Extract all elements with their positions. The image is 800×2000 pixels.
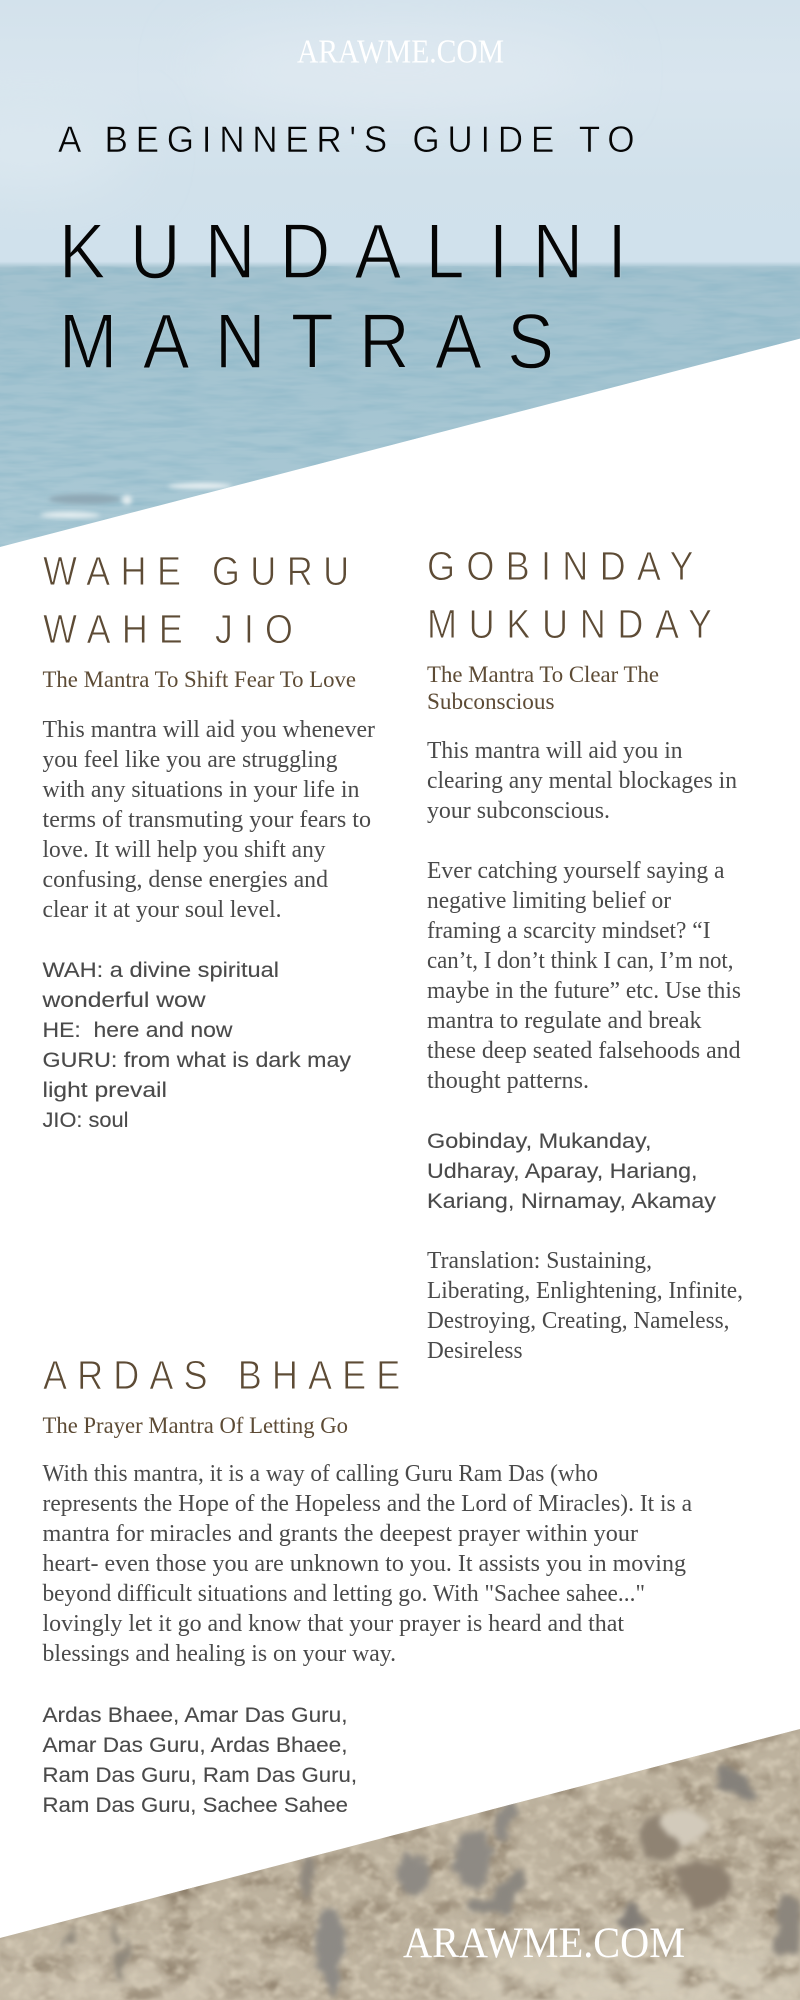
subheading: The Mantra To Shift Fear To Love bbox=[42, 667, 356, 692]
body text: mantra to regulate and break bbox=[427, 1007, 702, 1034]
mantra words: Gobinday, Mukanday, bbox=[427, 1130, 652, 1153]
site name bottom: ARAWME.COM bbox=[403, 1920, 685, 1967]
translation bbox=[427, 1247, 743, 1364]
heading: Wahe Guru: WAHE JIO bbox=[43, 607, 293, 653]
heading: Gobinday Mukunday: MUKUNDAY bbox=[427, 602, 712, 648]
mantra words: Udharay, Aparay, Hariang, bbox=[427, 1160, 698, 1183]
body text: negative limiting belief or bbox=[427, 887, 671, 914]
body text: clear it at your soul level. bbox=[42, 896, 282, 923]
body text: confusing, dense energies and bbox=[42, 866, 328, 893]
translation: Liberating, Enlightening, Infinite, bbox=[427, 1277, 743, 1304]
mantra glossary bbox=[41, 959, 352, 1132]
body text bbox=[42, 1460, 692, 1667]
mantra words: Amar Das Guru, Ardas Bhaee, bbox=[42, 1734, 348, 1757]
heading: Gobinday Mukunday bbox=[427, 544, 712, 648]
subheading: The Mantra To Clear The bbox=[427, 662, 659, 687]
panel: Gobinday Mukunday bbox=[427, 544, 743, 1364]
title block: MANTRAS bbox=[59, 298, 554, 385]
body text: your subconscious. bbox=[427, 797, 610, 824]
mantra glossary: GURU: from what is dark may bbox=[42, 1049, 352, 1072]
subheading: The Prayer Mantra Of Letting Go bbox=[42, 1413, 348, 1438]
body text: thought patterns. bbox=[427, 1067, 589, 1094]
body text: lovingly let it go and know that your prayer is heard and that bbox=[42, 1610, 624, 1637]
hero photo: sea and sky bbox=[0, 0, 800, 548]
body text bbox=[427, 737, 741, 1094]
body text: Ever catching yourself saying a bbox=[427, 857, 725, 884]
translation: Translation: Sustaining, bbox=[427, 1247, 652, 1274]
body text: heart- even those you are unknown to you. It assists you in moving bbox=[42, 1550, 686, 1577]
body text bbox=[42, 716, 375, 923]
subheading bbox=[427, 662, 659, 714]
body text: represents the Hope of the Hopeless and the Lord of Miracles). It is a bbox=[42, 1490, 692, 1517]
mantra glossary: light prevail bbox=[42, 1079, 167, 1102]
body text: love. It will help you shift any bbox=[42, 836, 326, 863]
mantra words: Ram Das Guru, Sachee Sahee bbox=[42, 1794, 348, 1817]
heading: Wahe Guru bbox=[43, 549, 349, 653]
translation: Destroying, Creating, Nameless, bbox=[427, 1307, 730, 1334]
title block: KUNDALINI bbox=[59, 208, 627, 295]
body text: beyond difficult situations and letting go. With "Sachee sahee..." bbox=[42, 1580, 645, 1607]
mantra glossary: JIO: soul bbox=[42, 1109, 128, 1132]
body text: terms of transmuting your fears to bbox=[42, 806, 371, 833]
subheading: Subconscious bbox=[427, 689, 555, 714]
title block bbox=[58, 118, 635, 385]
rock photo: bottom band bbox=[0, 1729, 800, 2000]
mantra words: Kariang, Nirnamay, Akamay bbox=[427, 1190, 717, 1213]
body text: these deep seated falsehoods and bbox=[427, 1037, 740, 1064]
site name top: ARAWME.COM bbox=[297, 34, 504, 70]
panel: Ardas Bhaee bbox=[42, 1353, 692, 1817]
panel: Wahe Guru Wahe Jio bbox=[41, 549, 375, 1132]
body text: framing a scarcity mindset? “I bbox=[427, 917, 710, 944]
mantra glossary: HE: here and now bbox=[42, 1019, 233, 1042]
body text: you feel like you are struggling bbox=[42, 746, 338, 773]
heading: Gobinday Mukunday: GOBINDAY bbox=[427, 544, 694, 590]
body text: clearing any mental blockages in bbox=[427, 767, 737, 794]
translation: Desireless bbox=[427, 1337, 522, 1364]
body text: can’t, I don’t think I can, I’m not, bbox=[427, 947, 734, 974]
title block: A BEGINNER'S GUIDE TO bbox=[58, 118, 635, 160]
mantra words bbox=[427, 1130, 717, 1213]
body text: maybe in the future” etc. Use this bbox=[427, 977, 741, 1004]
body text: With this mantra, it is a way of calling Guru Ram Das (who bbox=[42, 1460, 598, 1487]
mantra words bbox=[42, 1704, 357, 1817]
body text: This mantra will aid you whenever bbox=[42, 716, 375, 743]
mantra words: Ram Das Guru, Ram Das Guru, bbox=[42, 1764, 357, 1787]
mantra glossary: wonderful wow bbox=[41, 989, 206, 1012]
heading: Ardas Bhaee: ARDAS BHAEE bbox=[43, 1353, 400, 1399]
heading: Wahe Guru: WAHE GURU bbox=[43, 549, 349, 595]
mantra glossary: WAH: a divine spiritual bbox=[42, 959, 279, 982]
body text: with any situations in your life in bbox=[42, 776, 360, 803]
mantra words: Ardas Bhaee, Amar Das Guru, bbox=[42, 1704, 348, 1727]
body text: blessings and healing is on your way. bbox=[42, 1640, 396, 1667]
body text: This mantra will aid you in bbox=[427, 737, 682, 764]
body text: mantra for miracles and grants the deepest prayer within your bbox=[42, 1520, 638, 1547]
